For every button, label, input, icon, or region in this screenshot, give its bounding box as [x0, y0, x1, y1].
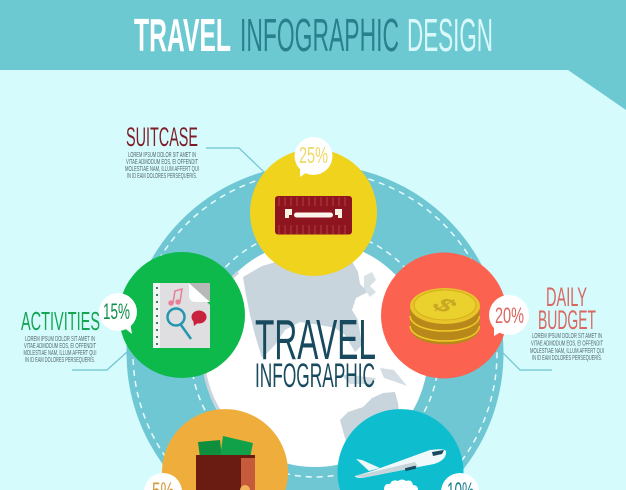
bubble: 20%: 20%	[495, 303, 524, 328]
outer ring	[126, 165, 503, 490]
panel: suitcase	[250, 137, 377, 276]
icon: music note	[173, 289, 182, 303]
text: suitcase	[125, 152, 199, 180]
title: TRAVEL	[134, 9, 231, 61]
icon: cloud	[384, 480, 418, 490]
text: suitcase: LOREM IPSUM DOLOR SIT AMET IN	[128, 152, 196, 159]
icon: magnifier	[168, 308, 184, 326]
icon: suitcase	[275, 196, 352, 234]
globe	[202, 241, 428, 467]
panel: plane	[337, 409, 479, 490]
icon: wallet	[196, 436, 255, 490]
heading: daily budget: DAILY	[546, 282, 587, 312]
bubble: 25%: 25%	[299, 142, 328, 168]
header banner	[0, 0, 626, 110]
title: INFOGRAPHIC	[240, 9, 399, 61]
text: DESIGN	[407, 9, 493, 61]
globe land: australia	[340, 392, 400, 442]
bubble: 15%: 15%	[103, 299, 130, 324]
icon: airplane	[355, 449, 446, 478]
panel: wallet	[144, 409, 288, 490]
center title: INFOGRAPHIC	[255, 357, 375, 395]
globe land: islands	[340, 368, 407, 386]
heading: daily budget	[538, 282, 596, 335]
text: activities: LOREM IPSUM DOLOR SIT AMET IN	[25, 336, 95, 343]
text: suitcase: IN ID EAM DOLORES PERSEQUERIS.	[127, 173, 197, 180]
bubble: 10%	[441, 473, 479, 490]
text: activities	[24, 336, 97, 364]
icon: document	[153, 283, 210, 348]
text: activities: IN ID EAM DOLORES PERSEQUERIS.	[25, 357, 95, 364]
bubble: 5%	[144, 473, 182, 490]
text: suitcase: VITAE ADMODUM EOS, EI OFFENDIT	[126, 159, 198, 166]
panel: activities	[99, 252, 245, 378]
heading: activities: ACTIVITIES	[21, 306, 100, 336]
globe land: japan and east	[364, 272, 376, 297]
globe land: asia	[243, 258, 368, 358]
leader lines	[72, 148, 552, 370]
text: suitcase: MOLESTIAE NAM, ILLUM AFFERT QUI	[125, 166, 199, 173]
icon: coins: $	[425, 294, 465, 316]
heading: suitcase: SUITCASE	[126, 122, 198, 152]
bubble: 20%	[489, 295, 529, 336]
icon: coins	[410, 288, 480, 344]
title	[134, 9, 493, 61]
text: activities: MOLESTIAE NAM, ILLUM AFFERT QUI	[24, 350, 97, 357]
panel: daily budget	[381, 252, 529, 378]
bubble: 15%	[99, 293, 137, 334]
icon: speech bubble	[192, 310, 206, 324]
center title	[255, 308, 376, 395]
text: daily budget	[530, 333, 604, 362]
center title: TRAVEL	[255, 308, 376, 372]
text: activities: VITAE ADMODUM EOS, EI OFFENDIT	[24, 343, 96, 350]
